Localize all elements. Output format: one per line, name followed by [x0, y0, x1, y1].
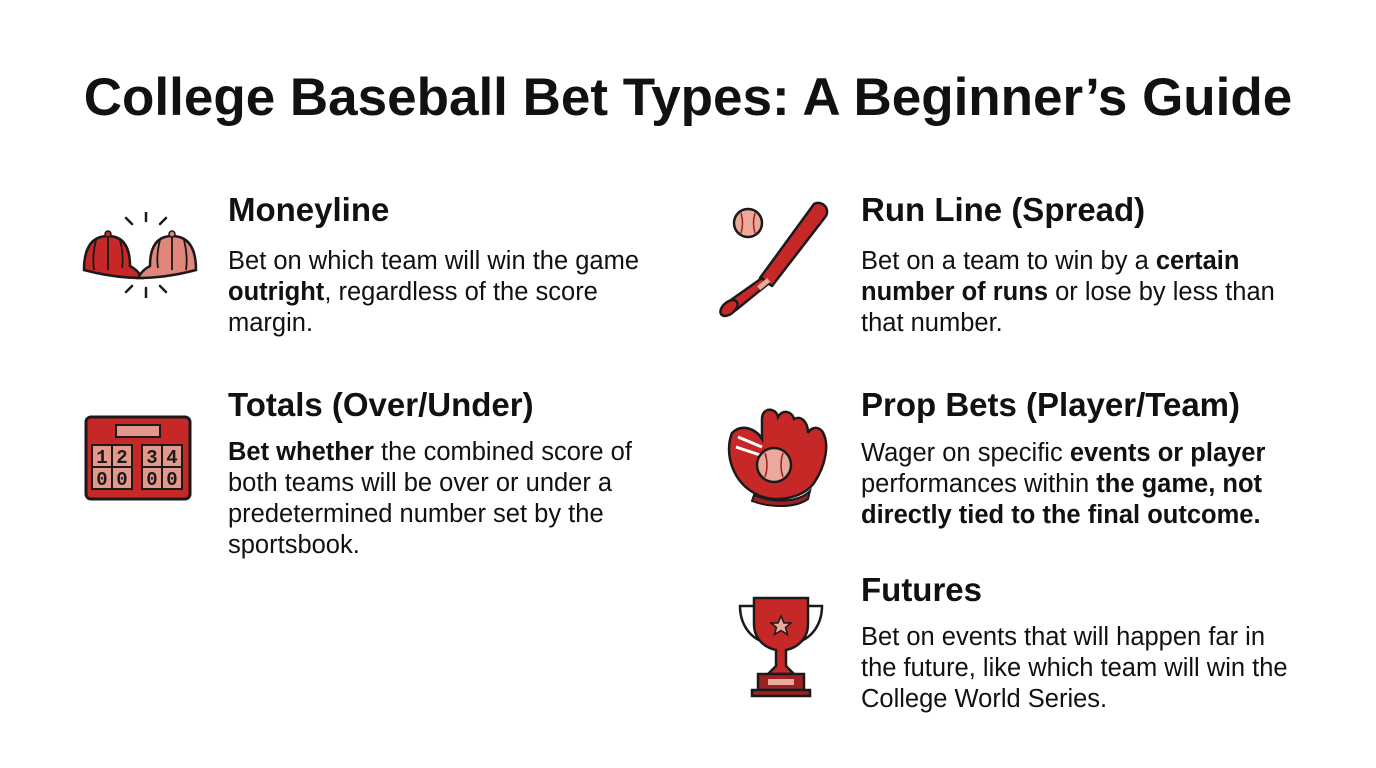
panel: prop bets — [728, 386, 1266, 529]
heading: totals: Totals (Over/Under) — [228, 386, 534, 423]
panel: run line — [719, 191, 1275, 337]
icon: caps — [82, 212, 198, 298]
heading: futures: Futures — [861, 571, 982, 608]
panel: moneyline — [82, 191, 639, 337]
icon: trophy — [738, 596, 824, 698]
icon: scoreboard — [84, 416, 192, 500]
text: futures: Bet on events that will happen far in the future, like which team will win the College World Series. — [861, 623, 1288, 713]
heading: moneyline: Moneyline — [228, 191, 389, 228]
text: run line: Bet on a team to win by a certain number of runs or lose by less than that number. — [861, 247, 1275, 337]
icon: scoreboard: 3 — [146, 447, 158, 469]
icon: scoreboard: 4 — [166, 447, 178, 469]
heading: run line: Run Line (Spread) — [861, 191, 1145, 228]
text: totals: Bet whether the combined score of both teams will be over or under a predetermined number set by the sportsbook. — [228, 438, 632, 559]
panel: totals — [84, 386, 632, 559]
text: moneyline: Bet on which team will win the game outright, regardless of the score margin. — [228, 247, 639, 337]
panel: futures — [738, 571, 1288, 713]
icon: glove — [728, 408, 828, 507]
icon: scoreboard: 0 — [146, 469, 158, 491]
icon: scoreboard: 0 — [166, 469, 178, 491]
text: prop bets: Wager on specific events or player performances within the game, not directly tied to the final outcome. — [861, 439, 1265, 529]
heading: prop bets: Prop Bets (Player/Team) — [861, 386, 1240, 423]
icon: scoreboard: 0 — [96, 469, 108, 491]
icon: scoreboard: 2 — [116, 447, 128, 469]
icon: bat and ball — [719, 202, 828, 318]
icon: scoreboard: 0 — [116, 469, 128, 491]
title: College Baseball Bet Types: A Beginner’s Guide — [84, 68, 1292, 127]
icon: scoreboard: 1 — [96, 447, 108, 469]
